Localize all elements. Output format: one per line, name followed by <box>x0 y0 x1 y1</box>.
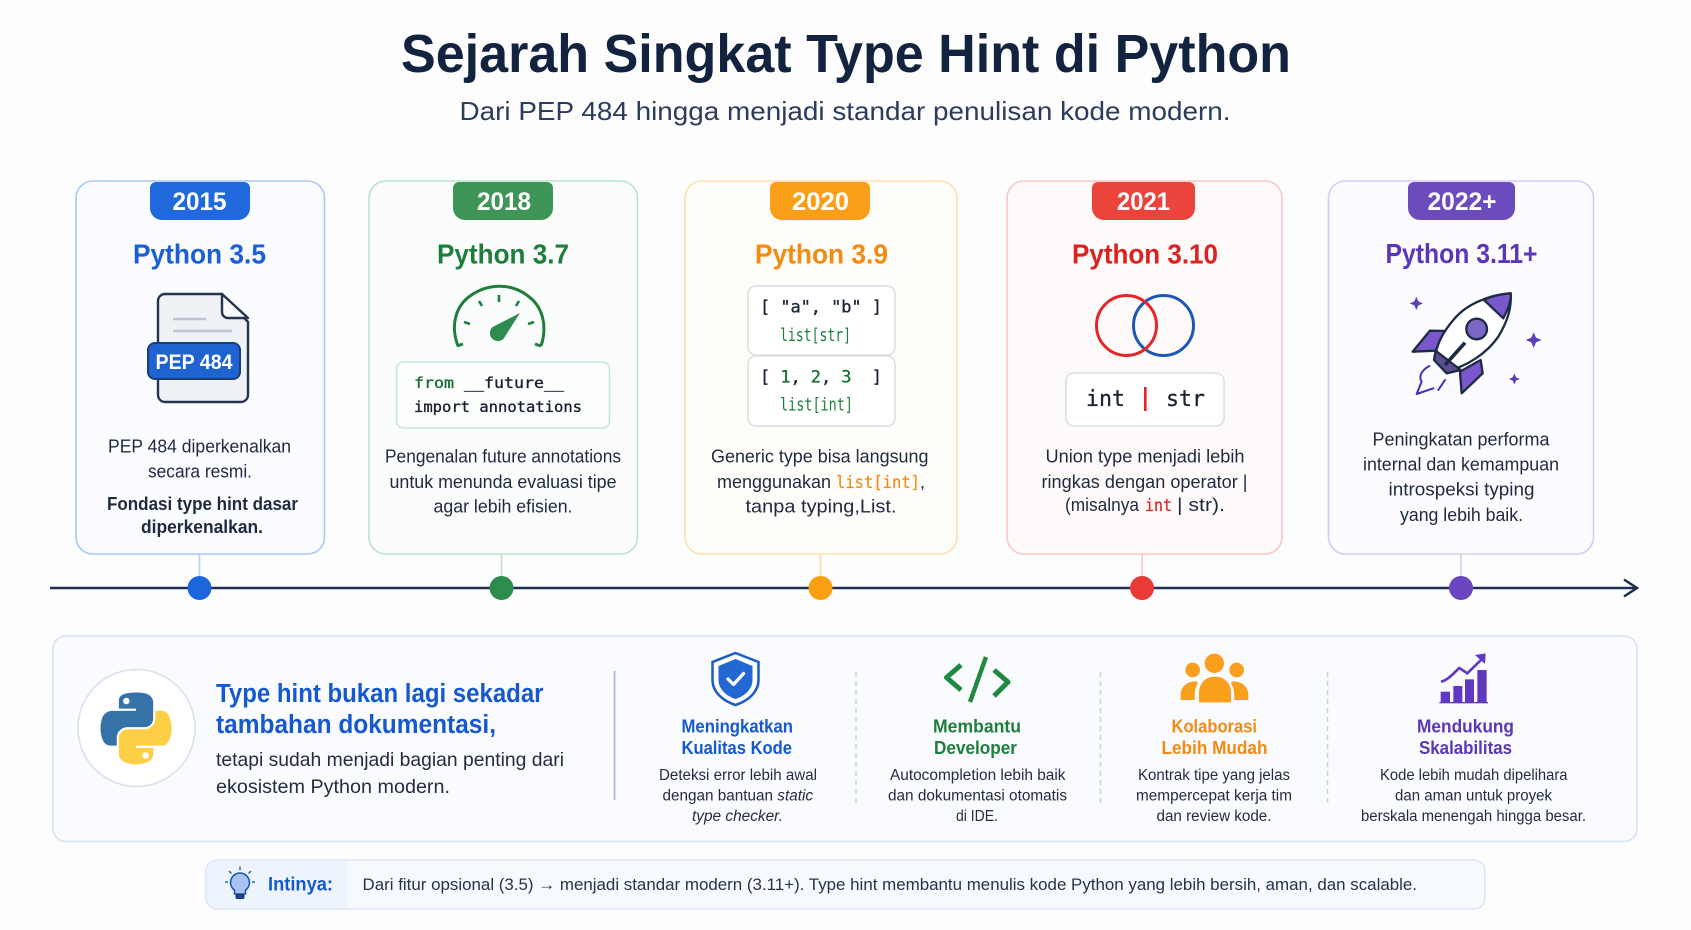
icon: rocket <box>1410 293 1542 394</box>
callout text: Dari fitur opsional (3.5) → menjadi standar modern (3.11+). Type hint membantu menulis kode Python yang lebih bersih, aman, dan scalable. <box>362 875 1417 894</box>
summary text <box>216 749 564 798</box>
year badge 2022+ <box>1408 182 1515 220</box>
description: Generic type bisa langsung <box>711 446 928 466</box>
benefit heading <box>1417 716 1514 758</box>
icon: shield <box>712 653 758 705</box>
year badge 2018 <box>453 182 553 220</box>
description: Union type menjadi lebih <box>1046 446 1244 466</box>
code box: import annotations <box>414 398 582 416</box>
panel: 2022+ Python 3.11+ <box>1328 181 1594 600</box>
year badge 2015 <box>150 182 250 220</box>
code box: list of int: list[int] <box>780 394 853 416</box>
code box: list of int <box>748 356 895 426</box>
benefit heading: Lebih Mudah <box>1162 737 1268 758</box>
benefit description <box>1136 767 1292 825</box>
panel: summary and benefits <box>53 636 1637 842</box>
year badge 2015: 2015 <box>172 188 227 216</box>
icon: light bulb <box>225 866 255 899</box>
description <box>1042 446 1248 516</box>
benefit heading: Membantu <box>933 716 1021 736</box>
description: untuk menunda evaluasi tipe <box>390 472 616 492</box>
description: Pengenalan future annotations <box>385 446 621 466</box>
icon: people <box>1181 654 1248 702</box>
benefit heading: Meningkatkan <box>682 716 793 736</box>
version heading: Python 3.5 <box>133 238 266 270</box>
panel: 2018 Python 3.7 <box>369 181 638 600</box>
description: diperkenalkan. <box>141 517 263 537</box>
panel: 2020 Python 3.9 <box>685 181 957 600</box>
version heading: Python 3.11+ <box>1386 238 1538 269</box>
code box: list of int: [ 1, 2, 3 ] <box>760 368 882 388</box>
benefit: developer help <box>888 657 1067 825</box>
panel: 2015 Python 3.5 <box>76 181 324 600</box>
benefit heading: Kolaborasi <box>1172 716 1257 736</box>
benefit description: Deteksi error lebih awal <box>659 767 817 784</box>
icon: PEP 484 document <box>148 294 248 402</box>
description: Fondasi type hint dasar <box>107 494 298 514</box>
title: Sejarah Singkat Type Hint di Python <box>401 24 1291 84</box>
benefit: collaboration <box>1136 654 1292 825</box>
icon: growth chart <box>1439 653 1488 703</box>
description: menggunakan <box>717 472 831 492</box>
benefit description: dengan bantuan static <box>662 788 813 804</box>
code box: int | str <box>1066 373 1224 426</box>
description: Peningkatan performa <box>1372 430 1550 450</box>
timeline axis <box>50 580 1637 596</box>
icon: code brackets <box>946 657 1008 702</box>
panel: 2021 Python 3.10 <box>1007 181 1282 600</box>
benefit description: berskala menengah hingga besar. <box>1361 808 1586 825</box>
code box: from __future__ <box>414 374 565 392</box>
description <box>107 436 298 537</box>
description <box>1363 430 1559 525</box>
benefit heading: Skalabilitas <box>1419 737 1512 758</box>
description: PEP 484 diperkenalkan <box>108 436 291 456</box>
callout label: Intinya: <box>268 874 333 896</box>
description: (misalnya <box>1065 495 1140 515</box>
summary text: ekosistem Python modern. <box>216 776 450 798</box>
description: int <box>1145 496 1172 516</box>
description: internal dan kemampuan <box>1363 454 1559 474</box>
icon: PEP 484 document: PEP 484 <box>156 351 233 374</box>
description: yang lebih baik. <box>1400 505 1523 525</box>
benefit heading <box>933 716 1021 758</box>
description: list[int] <box>836 473 920 493</box>
description: , <box>920 472 925 492</box>
description <box>711 446 928 516</box>
callout: key takeaway <box>206 860 1485 909</box>
benefit description: Kode lebih mudah dipelihara <box>1380 767 1568 784</box>
benefit description <box>1361 767 1586 825</box>
icon: speed gauge <box>454 286 544 346</box>
code box: list of str: list[str] <box>780 325 851 346</box>
benefit: scalability <box>1361 653 1586 825</box>
code box: list of str: [ "a", "b" ] <box>760 298 882 318</box>
summary text: tetapi sudah menjadi bagian penting dari <box>216 749 564 771</box>
benefit heading: Developer <box>934 737 1017 758</box>
icon: union circles <box>1096 296 1194 356</box>
benefit: code quality <box>659 653 817 825</box>
description: secara resmi. <box>148 462 252 482</box>
description <box>385 446 621 516</box>
icon: python logo <box>78 670 195 786</box>
benefit description: di IDE. <box>956 808 998 825</box>
benefit description: dan aman untuk proyek <box>1395 788 1552 804</box>
summary heading: Type hint bukan lagi sekadar <box>216 680 544 708</box>
year badge 2020 <box>770 182 870 220</box>
benefit heading: Mendukung <box>1417 716 1514 736</box>
benefit heading <box>1162 716 1268 758</box>
benefit description <box>888 767 1067 825</box>
year badge 2018: 2018 <box>477 188 531 216</box>
benefit description: dan review kode. <box>1156 808 1272 825</box>
code box: int | str: int <box>1086 387 1125 412</box>
summary heading: tambahan dokumentasi, <box>216 711 496 739</box>
benefit description: mempercepat kerja tim <box>1136 788 1292 804</box>
description: introspeksi typing <box>1388 480 1534 500</box>
subtitle: Dari PEP 484 hingga menjadi standar penulisan kode modern. <box>460 96 1230 126</box>
benefit description: Kontrak tipe yang jelas <box>1138 767 1290 784</box>
description: tanpa typing,List. <box>746 496 896 516</box>
benefit description: Autocompletion lebih baik <box>890 767 1066 784</box>
benefit description <box>659 767 817 825</box>
year badge 2021: 2021 <box>1117 188 1170 216</box>
description: | str). <box>1177 495 1225 515</box>
version heading: Python 3.7 <box>437 238 569 270</box>
benefit heading: Kualitas Kode <box>682 737 792 758</box>
year badge 2021 <box>1092 182 1195 220</box>
year badge 2022+: 2022+ <box>1428 188 1496 216</box>
description: agar lebih efisien. <box>434 496 572 516</box>
summary heading <box>216 680 544 739</box>
code box: int | str: str <box>1166 387 1205 412</box>
version heading: Python 3.9 <box>755 238 888 270</box>
version heading: Python 3.10 <box>1072 238 1218 270</box>
benefit description: dan dokumentasi otomatis <box>888 788 1067 804</box>
benefit description: type checker. <box>692 808 783 825</box>
description: ringkas dengan operator | <box>1042 472 1248 492</box>
code box: list of str <box>748 286 895 355</box>
code box <box>396 362 610 428</box>
year badge 2020: 2020 <box>792 188 849 216</box>
benefit heading <box>682 716 793 758</box>
